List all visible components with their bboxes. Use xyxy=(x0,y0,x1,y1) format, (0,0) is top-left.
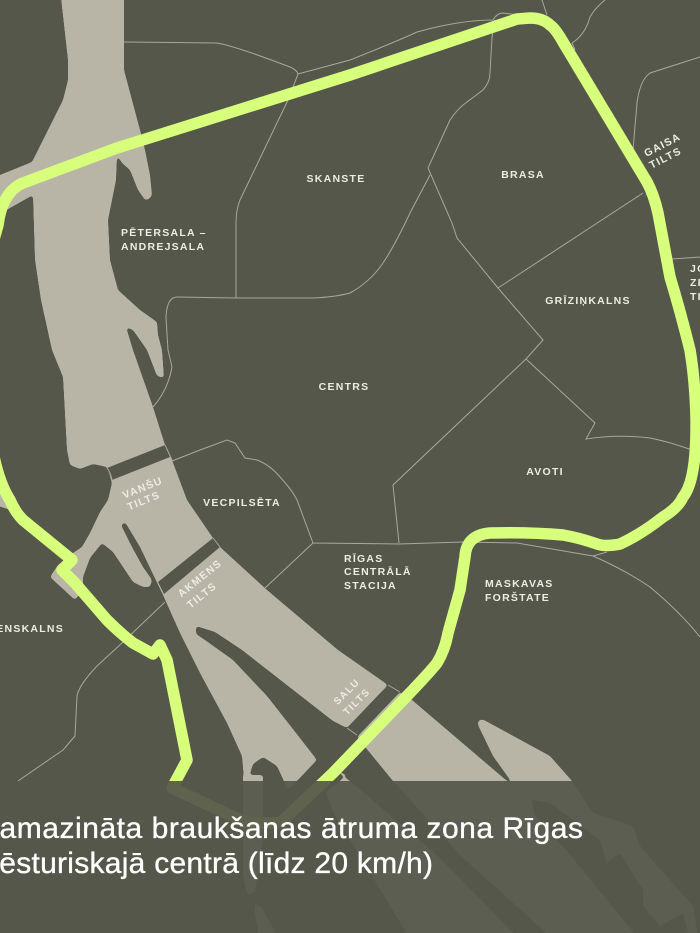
bridge: Salu xyxy=(347,685,400,735)
district labels: RĪGAS xyxy=(344,553,384,565)
district labels: CENTRS xyxy=(319,381,369,393)
bridge label: Akmens tilts: TILTS xyxy=(185,580,219,611)
bridge: lower dark section xyxy=(297,760,328,786)
bridge label: Vanšu tilts xyxy=(121,474,165,513)
bridge label: Salu tilts: SALU xyxy=(332,677,363,708)
district labels: STACIJA xyxy=(344,580,397,592)
caption backdrop xyxy=(0,781,700,933)
bridge label: Salu tilts: TILTS xyxy=(342,687,373,718)
district labels xyxy=(0,169,700,635)
bridge label: Salu tilts xyxy=(332,677,373,718)
district labels: VECPILSĒTA xyxy=(203,497,281,509)
bridge label: Akmens tilts: AKMENS xyxy=(176,557,224,600)
district labels: ANDREJSALA xyxy=(121,241,205,253)
bridge label: Vanšu tilts: TILTS xyxy=(126,489,162,513)
bridge label: Gaisa tilts: TILTS xyxy=(647,145,684,172)
district labels: FORŠTATE xyxy=(485,591,550,604)
bridge: Akmens xyxy=(158,538,220,594)
bridge: Vanšu xyxy=(107,445,170,480)
district labels: SKANSTE xyxy=(307,173,365,185)
district labels: PĒTERSALA – xyxy=(121,227,207,239)
district labels: CENTRĀLĀ xyxy=(344,566,412,578)
district labels: GRĪZIŅKALNS xyxy=(545,295,631,307)
district labels: MASKAVAS xyxy=(485,578,554,590)
district labels: BRASA xyxy=(501,169,545,181)
caption xyxy=(0,812,583,880)
district labels: AVOTI xyxy=(526,466,564,478)
bridge label: Vanšu tilts: VANŠU xyxy=(121,474,165,502)
river dark island xyxy=(532,800,690,933)
bridge label: Gaisa tilts xyxy=(642,131,684,172)
bridge label: Gaisa tilts: GAISA xyxy=(642,131,683,160)
